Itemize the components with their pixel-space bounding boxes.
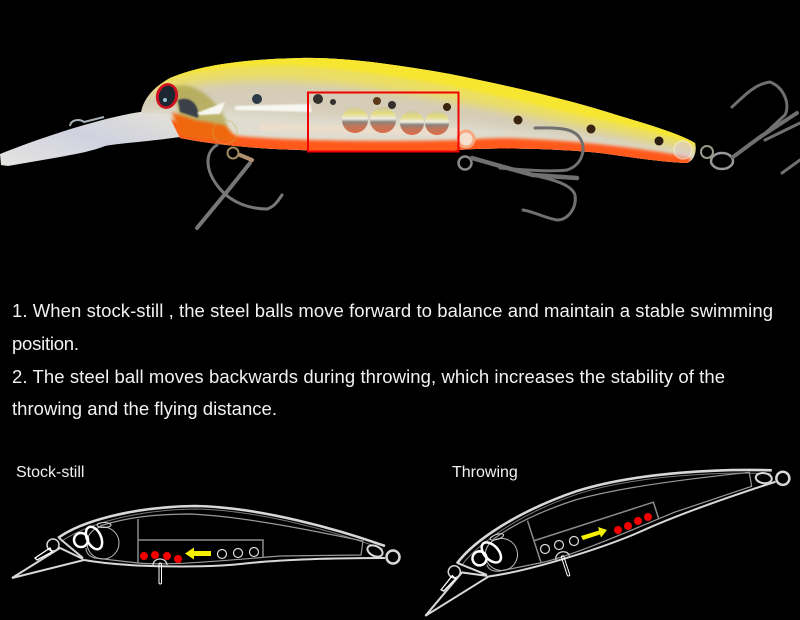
description text: throwing and the flying distance. [12, 398, 277, 419]
body spots [252, 94, 664, 146]
lure body [141, 58, 696, 163]
label: stock-still: Stock-still [16, 464, 84, 481]
red balls [614, 513, 652, 534]
empty ball positions [218, 548, 258, 558]
description text: 1. When stock-still , the steel balls move forward to balance and maintain a stable swimming [12, 300, 773, 321]
lure eye [153, 81, 181, 111]
middle treble hook [458, 128, 583, 220]
empty ball positions [540, 536, 578, 554]
panel: lure photo [0, 40, 800, 228]
lip eyelet [70, 117, 104, 126]
lure lip [0, 110, 180, 166]
yellow arrow right [581, 527, 607, 540]
label: throwing: Throwing [452, 464, 518, 481]
red balls [140, 551, 182, 563]
steel balls [342, 107, 449, 135]
description text: 2. The steel ball moves backwards during throwing, which increases the stability of the [12, 366, 725, 387]
yellow arrow left [185, 548, 211, 560]
diagram: stock-still lure [12, 506, 400, 584]
description text: position. [12, 333, 79, 354]
front treble hook [197, 145, 282, 228]
diagram: throwing lure [403, 428, 797, 620]
description text [12, 300, 773, 419]
red highlight box [308, 92, 458, 152]
tail treble hook [701, 82, 800, 173]
